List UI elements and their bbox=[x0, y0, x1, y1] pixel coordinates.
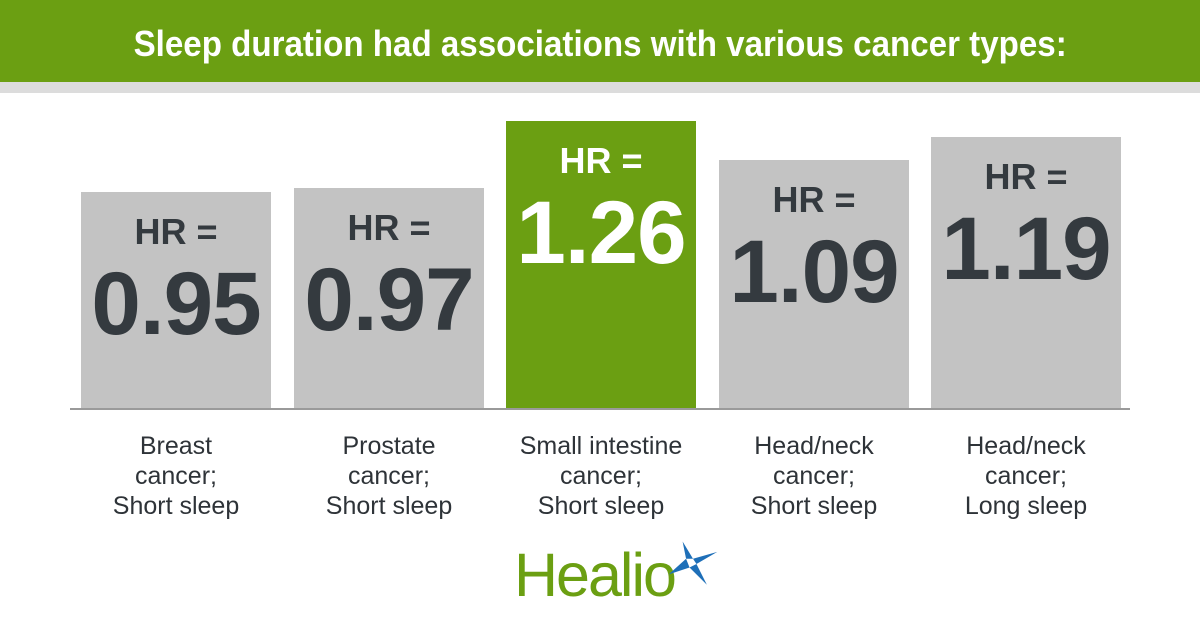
baseline bbox=[70, 408, 1130, 410]
label: small intestine: Short sleep bbox=[538, 492, 664, 520]
bar: head/neck short: 1.09 bbox=[729, 221, 899, 321]
label: small intestine bbox=[520, 432, 682, 520]
label: head/neck long: Head/neck bbox=[966, 432, 1086, 460]
label: small intestine: cancer; bbox=[560, 462, 642, 490]
label: small intestine: Small intestine bbox=[520, 432, 682, 460]
label: prostate bbox=[326, 432, 452, 520]
bar: breast: HR = bbox=[134, 211, 218, 252]
logo: Healio: Healio bbox=[514, 541, 675, 609]
bar: head/neck long: HR = bbox=[984, 156, 1068, 197]
header bbox=[0, 0, 1200, 82]
bar: breast bbox=[81, 192, 271, 409]
bar: breast: 0.95 bbox=[91, 253, 261, 353]
label: prostate: Short sleep bbox=[326, 492, 452, 520]
label: head/neck short bbox=[751, 432, 877, 520]
bar: prostate: 0.97 bbox=[304, 249, 474, 349]
bar: prostate: HR = bbox=[347, 207, 431, 248]
label: breast: Breast bbox=[140, 432, 212, 460]
bar: head/neck long: 1.19 bbox=[941, 198, 1111, 298]
label: head/neck long: cancer; bbox=[985, 462, 1067, 490]
bar: head/neck short: HR = bbox=[772, 179, 856, 220]
label: head/neck long bbox=[965, 432, 1087, 520]
bar: head/neck long bbox=[931, 137, 1121, 409]
icon: star bbox=[668, 542, 718, 585]
bar: small intestine bbox=[506, 121, 696, 409]
label: head/neck long: Long sleep bbox=[965, 492, 1087, 520]
bar: small intestine: HR = bbox=[559, 140, 643, 181]
label: head/neck short: Head/neck bbox=[754, 432, 874, 460]
label: prostate: Prostate bbox=[342, 432, 436, 460]
bar: head/neck short bbox=[719, 160, 909, 409]
label: prostate: cancer; bbox=[348, 462, 430, 490]
title: Sleep duration had associations with various cancer types: bbox=[133, 23, 1067, 64]
bar: prostate bbox=[294, 188, 484, 409]
label: breast: Short sleep bbox=[113, 492, 239, 520]
label: breast: cancer; bbox=[135, 462, 217, 490]
label: head/neck short: Short sleep bbox=[751, 492, 877, 520]
label: breast bbox=[113, 432, 239, 520]
label: head/neck short: cancer; bbox=[773, 462, 855, 490]
bar: small intestine: 1.26 bbox=[516, 182, 686, 282]
